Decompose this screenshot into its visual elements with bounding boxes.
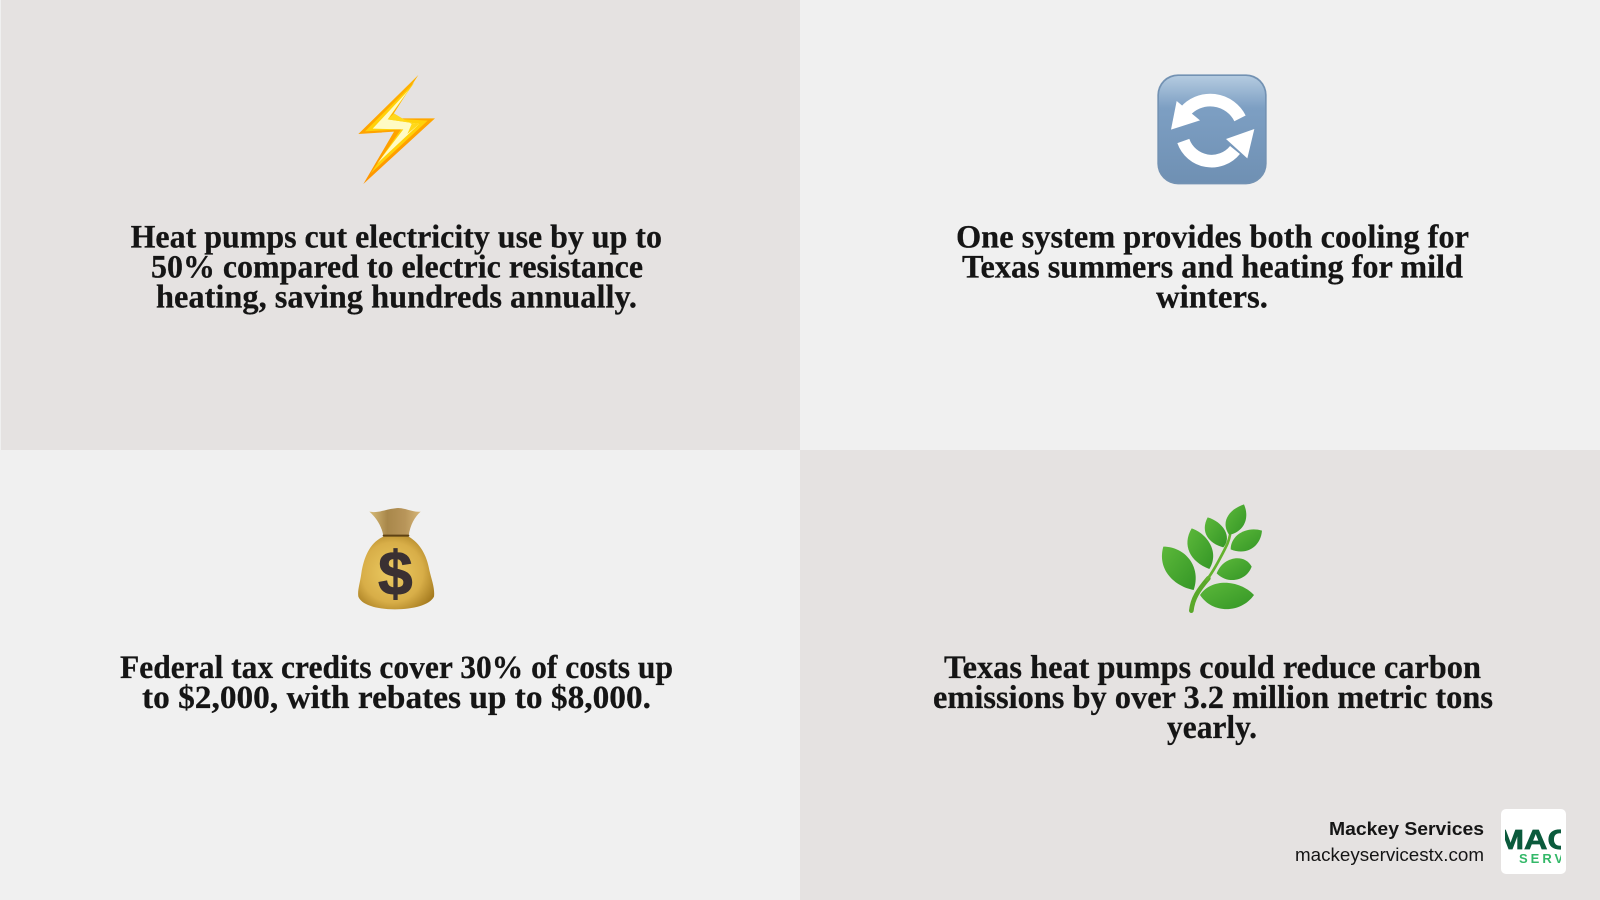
text: electricity savings: heating, saving hundreds annually. xyxy=(156,280,637,316)
icon: herb sprig xyxy=(1162,504,1262,611)
panel: carbon reduction xyxy=(800,450,1600,900)
brand: Mackey Services name: Mackey Services xyxy=(1329,818,1484,839)
text: tax credits: Federal tax credits cover 30% of costs up xyxy=(120,650,673,686)
logo: Mackey Services: MAC xyxy=(1497,824,1571,855)
brand: website: mackeyservicestx.com xyxy=(1295,845,1484,865)
text: tax credits: to $2,000, with rebates up to $8,000. xyxy=(142,680,651,716)
logo: Mackey Services: SERV xyxy=(1519,851,1566,866)
panel: electricity savings xyxy=(1,0,800,450)
text: cooling and heating: Texas summers and heating for mild xyxy=(962,250,1463,286)
icon: refresh arrows xyxy=(1157,74,1267,184)
text: carbon reduction: Texas heat pumps could reduce carbon xyxy=(944,650,1481,686)
icon: money bag: $ xyxy=(378,540,413,609)
text: carbon reduction: yearly. xyxy=(1167,710,1257,746)
panel: cooling and heating xyxy=(800,0,1600,450)
icon: money bag xyxy=(358,508,434,609)
logo: Mackey Services xyxy=(1501,809,1566,874)
icon: lightning bolt xyxy=(358,75,435,184)
text: electricity savings: Heat pumps cut electricity use by up to xyxy=(131,220,662,256)
text: electricity savings: 50% compared to electric resistance xyxy=(151,250,643,286)
text: cooling and heating: One system provides both cooling for xyxy=(956,220,1469,256)
text: carbon reduction: emissions by over 3.2 million metric tons xyxy=(933,680,1493,716)
text: cooling and heating: winters. xyxy=(1156,280,1268,316)
panel: tax credits xyxy=(0,450,800,900)
